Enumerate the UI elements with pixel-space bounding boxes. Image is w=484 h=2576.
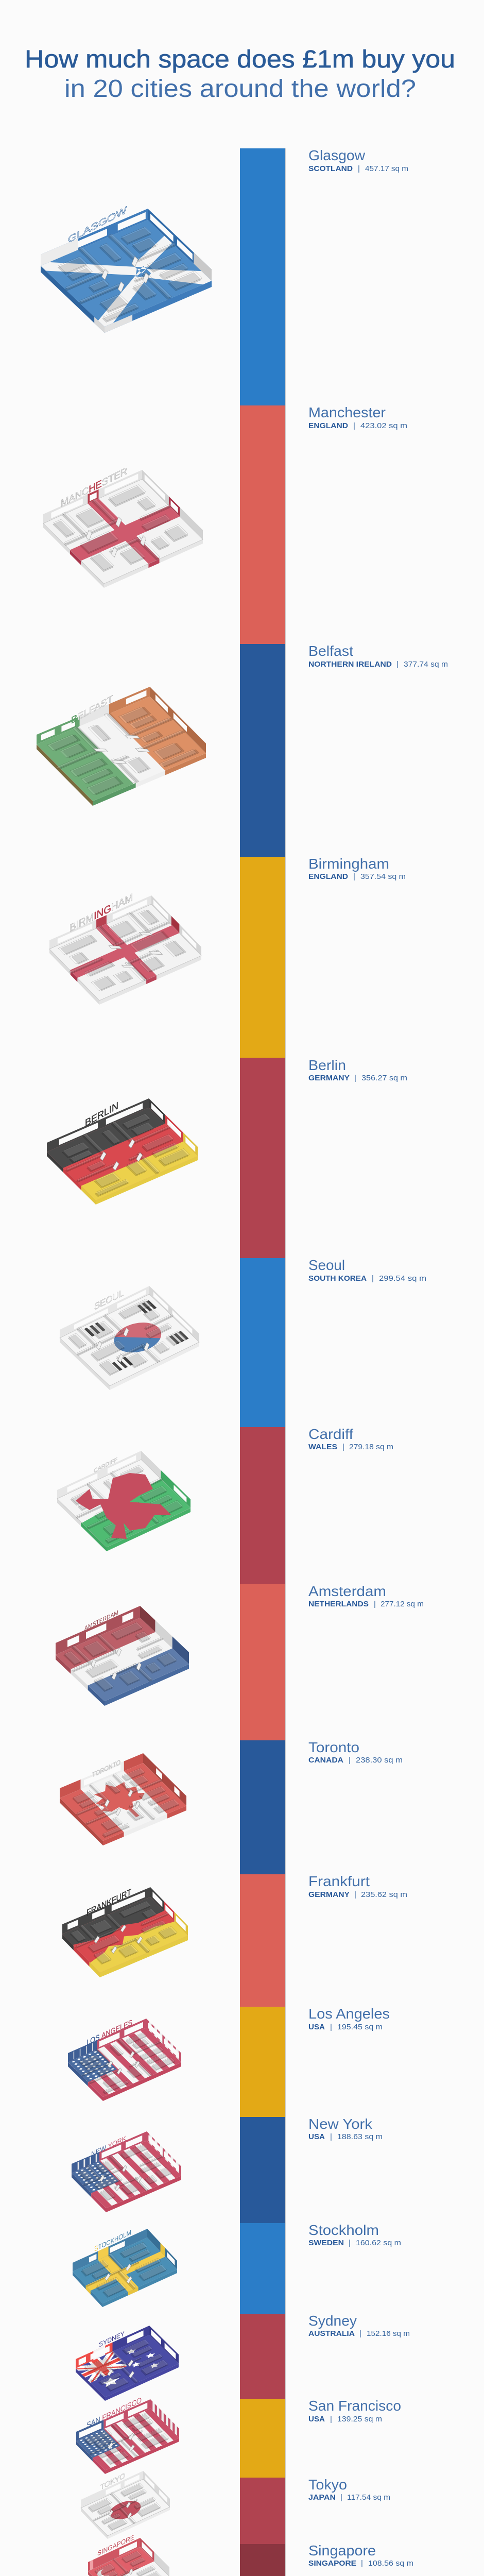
label: Berlin: GERMANY xyxy=(308,1074,350,1082)
label: Singapore: 108.56 sq m xyxy=(368,2559,413,2568)
label: Stockholm: 160.62 sq m xyxy=(356,2239,401,2247)
floor plan: Toronto xyxy=(59,1753,188,1845)
floor with red disc xyxy=(80,2479,170,2536)
floor with green band xyxy=(56,1458,192,1547)
floor plan: New York xyxy=(71,2131,182,2212)
base xyxy=(62,1934,188,1977)
label: Cardiff: Cardiff xyxy=(308,1426,353,1442)
floor plan: San Francisco xyxy=(76,2396,179,2474)
label: Manchester xyxy=(308,404,407,430)
base xyxy=(81,2507,170,2539)
back-left wall xyxy=(37,687,150,744)
floor plan: Sydney xyxy=(75,2326,179,2401)
label: Glasgow xyxy=(308,147,408,173)
base xyxy=(57,1499,191,1551)
base xyxy=(60,1338,199,1390)
floor plan: Tokyo xyxy=(80,2471,170,2539)
label: Los Angeles: | xyxy=(330,2023,332,2031)
label: Glasgow: Glasgow xyxy=(308,147,366,163)
wall lettering: MANCHESTER xyxy=(61,465,127,510)
label: Birmingham: 357.54 sq m xyxy=(360,872,406,881)
back-right wall xyxy=(143,1753,186,1806)
back-left wall xyxy=(81,2471,143,2508)
base xyxy=(41,266,212,333)
label: San Francisco: USA xyxy=(308,2415,325,2424)
label: Frankfurt xyxy=(308,1873,407,1899)
wall lettering: STOCKHOLM xyxy=(94,2228,131,2253)
base xyxy=(68,2062,181,2101)
label: Stockholm: SWEDEN xyxy=(308,2239,344,2247)
floor plan: Berlin xyxy=(46,1098,199,1205)
label: New York: USA xyxy=(308,2132,325,2141)
label: Stockholm: Stockholm xyxy=(308,2222,379,2238)
floor with tricolour xyxy=(34,696,206,802)
back-right wall xyxy=(149,1098,198,1156)
back-left wall xyxy=(60,1753,143,1798)
title line one: How much space does £1m buy you xyxy=(25,46,455,73)
label: Toronto: | xyxy=(349,1756,351,1765)
floor with tricolour xyxy=(55,1616,191,1701)
label: Sydney: 152.16 sq m xyxy=(367,2329,410,2338)
back-left wall xyxy=(57,1451,141,1499)
back-left wall xyxy=(72,2131,147,2173)
base xyxy=(72,2173,181,2212)
label: Stockholm: | xyxy=(349,2239,351,2247)
label: San Francisco: 139.25 sq m xyxy=(337,2415,382,2424)
floor plan: Manchester xyxy=(42,465,204,588)
label: Glasgow: SCOTLAND xyxy=(308,164,353,173)
label: Tokyo xyxy=(308,2477,390,2502)
base xyxy=(37,744,206,806)
label: Los Angeles: 195.45 sq m xyxy=(337,2023,383,2031)
wall lettering: GLASGOW xyxy=(68,205,127,246)
label: Berlin xyxy=(308,1057,407,1082)
floor plan: Cardiff xyxy=(56,1451,192,1551)
label: Berlin: 356.27 sq m xyxy=(361,1074,407,1082)
label: Toronto xyxy=(308,1739,403,1765)
base xyxy=(88,2571,169,2576)
label: Los Angeles xyxy=(308,2006,390,2031)
label: San Francisco: San Francisco xyxy=(308,2398,401,2414)
label: Cardiff: 279.18 sq m xyxy=(349,1443,393,1451)
floor with crescent xyxy=(88,2547,169,2576)
label: Frankfurt: 235.62 sq m xyxy=(361,1890,407,1899)
label: Singapore: SINGAPORE xyxy=(308,2559,356,2568)
label: Singapore: Singapore xyxy=(308,2543,376,2558)
label: Belfast: NORTHERN IRELAND xyxy=(308,660,392,669)
base xyxy=(49,949,201,1005)
label: Manchester: ENGLAND xyxy=(308,421,348,430)
label: Belfast: | xyxy=(396,660,399,669)
wall lettering: TOKYO xyxy=(100,2472,125,2492)
wall lettering: SINGAPORE xyxy=(97,2533,134,2557)
back-left wall xyxy=(76,2326,149,2368)
wall lettering: BERLIN xyxy=(85,1100,118,1129)
wall lettering: SYDNEY xyxy=(99,2330,125,2349)
label: Sydney: Sydney xyxy=(308,2313,357,2329)
floor plan: Frankfurt xyxy=(62,1887,189,1977)
floor plan: Seoul xyxy=(59,1286,201,1390)
back-left wall xyxy=(62,1887,150,1934)
floor plan: Birmingham xyxy=(47,892,201,1005)
label: Birmingham xyxy=(308,856,406,881)
back-left wall xyxy=(49,895,151,949)
label: Frankfurt: | xyxy=(354,1890,356,1899)
back-left wall xyxy=(73,2229,147,2272)
label: Frankfurt: Frankfurt xyxy=(308,1873,370,1889)
back-left wall xyxy=(43,470,142,523)
back-right wall xyxy=(146,2019,181,2062)
back-right wall xyxy=(151,895,201,956)
label: Frankfurt: GERMANY xyxy=(308,1890,350,1899)
label: Amsterdam: 277.12 sq m xyxy=(381,1600,424,1608)
label: New York: | xyxy=(330,2132,332,2141)
label: Sydney: | xyxy=(359,2329,361,2338)
label: Birmingham: ENGLAND xyxy=(308,872,348,881)
label: Seoul xyxy=(308,1257,426,1283)
title xyxy=(25,46,455,103)
back-left wall xyxy=(76,2399,150,2441)
title line two: in 20 cities around the world? xyxy=(64,75,416,103)
label: Singapore: | xyxy=(361,2559,363,2568)
label: Tokyo: Tokyo xyxy=(308,2477,347,2493)
back-right wall xyxy=(148,209,212,281)
label: Tokyo: JAPAN xyxy=(308,2493,336,2502)
wall lettering: LOS ANGELES xyxy=(87,2019,132,2047)
label: Cardiff xyxy=(308,1426,393,1451)
label: Seoul: 299.54 sq m xyxy=(379,1274,426,1283)
base xyxy=(73,2269,177,2307)
label: Amsterdam xyxy=(308,1583,424,1608)
floor with stars and stripes xyxy=(76,2408,179,2470)
label: Berlin: Berlin xyxy=(308,1057,346,1073)
floor with taegeuk xyxy=(59,1293,201,1386)
label: Sydney: AUSTRALIA xyxy=(308,2329,355,2338)
label: Seoul: SOUTH KOREA xyxy=(308,1274,367,1283)
label: Manchester: 423.02 sq m xyxy=(360,421,407,430)
label: Cardiff: | xyxy=(342,1443,344,1451)
label: Seoul: Seoul xyxy=(308,1257,345,1273)
label: New York: New York xyxy=(308,2116,373,2132)
label: Manchester: Manchester xyxy=(308,404,386,420)
wall lettering: SAN FRANCISCO xyxy=(87,2396,142,2430)
back-left wall xyxy=(56,1606,140,1655)
back-right wall xyxy=(143,2471,170,2507)
back-right wall xyxy=(150,1887,188,1936)
wall lettering: AMSTERDAM xyxy=(84,1609,118,1632)
label: Tokyo: 117.54 sq m xyxy=(347,2493,390,2502)
base xyxy=(60,1798,186,1845)
label: Manchester: | xyxy=(353,421,355,430)
label: Birmingham: Birmingham xyxy=(308,856,389,872)
floor plan: Glasgow xyxy=(40,205,213,333)
label: Seoul: | xyxy=(372,1274,374,1283)
floor with stars and stripes xyxy=(67,2027,182,2097)
label: Toronto: Toronto xyxy=(308,1739,359,1755)
back-right wall xyxy=(149,2326,179,2364)
base xyxy=(47,1152,198,1205)
back-right wall xyxy=(150,2399,179,2438)
floor with cross xyxy=(42,478,204,584)
floor plan: Belfast xyxy=(34,687,206,806)
floor with tricolour xyxy=(46,1106,199,1200)
back-right wall xyxy=(149,1286,199,1342)
label: Los Angeles: Los Angeles xyxy=(308,2006,390,2022)
label: San Francisco xyxy=(308,2398,401,2424)
label: New York: 188.63 sq m xyxy=(337,2132,383,2141)
floor plan: Amsterdam xyxy=(55,1606,191,1706)
base xyxy=(56,1655,189,1706)
floor with cross xyxy=(47,903,201,1001)
label: Berlin: | xyxy=(354,1074,356,1082)
floor plan: Stockholm xyxy=(72,2228,177,2307)
floor with stars and stripes xyxy=(71,2140,182,2208)
back-right wall xyxy=(142,470,203,539)
wall lettering: BIRMINGHAM xyxy=(70,892,133,935)
label: Amsterdam: Amsterdam xyxy=(308,1583,386,1599)
label: Birmingham: | xyxy=(353,872,355,881)
label: San Francisco: | xyxy=(330,2415,332,2424)
label: Belfast: Belfast xyxy=(308,643,353,659)
stacked bar of floor area by city xyxy=(240,148,286,2576)
label: Stockholm xyxy=(308,2222,401,2247)
label: Belfast: 377.74 sq m xyxy=(404,660,448,669)
back-right wall xyxy=(141,1451,191,1508)
dragon xyxy=(76,1473,171,1539)
back-left wall xyxy=(68,2019,146,2062)
label: Amsterdam: | xyxy=(374,1600,376,1608)
wall lettering: TORONTO xyxy=(92,1758,120,1779)
floor with jagged tricolour xyxy=(62,1896,189,1973)
label: Tokyo: | xyxy=(340,2493,342,2502)
label: Glasgow: | xyxy=(358,164,360,173)
wall lettering: CARDIFF xyxy=(94,1456,117,1475)
floor with maple leaf xyxy=(59,1762,188,1841)
wall lettering: SEOUL xyxy=(94,1287,124,1313)
label: Toronto: CANADA xyxy=(308,1756,343,1765)
label: Amsterdam: NETHERLANDS xyxy=(308,1600,369,1608)
label: Glasgow: 457.17 sq m xyxy=(365,164,408,173)
back-right wall xyxy=(150,687,206,753)
back-right wall xyxy=(147,2229,177,2269)
back-right wall xyxy=(140,1606,189,1664)
back-left wall xyxy=(60,1286,149,1338)
floor with saltire xyxy=(40,218,213,327)
base xyxy=(76,2438,179,2474)
back-right wall xyxy=(147,2131,181,2176)
label: Los Angeles: USA xyxy=(308,2023,325,2031)
floor plan: Singapore xyxy=(88,2533,169,2576)
floor with ensign xyxy=(75,2334,179,2397)
wall lettering: BELFAST xyxy=(71,693,113,726)
floor with cross xyxy=(72,2237,177,2303)
label: Sydney xyxy=(308,2313,410,2338)
wall lettering: FRANKFURT xyxy=(87,1887,131,1918)
label: Belfast xyxy=(308,643,448,669)
wall lettering: NEW YORK xyxy=(91,2134,126,2158)
label: Singapore xyxy=(308,2543,413,2568)
back-right wall xyxy=(140,2538,169,2576)
floor plan: Los Angeles xyxy=(67,2019,182,2101)
label: Toronto: 238.30 sq m xyxy=(356,1756,403,1765)
back-left wall xyxy=(47,1098,149,1152)
label: Cardiff: WALES xyxy=(308,1443,337,1451)
base xyxy=(43,523,203,588)
back-left wall xyxy=(41,209,148,266)
base xyxy=(76,2364,179,2401)
label: New York xyxy=(308,2116,383,2141)
back-left wall xyxy=(88,2538,140,2571)
